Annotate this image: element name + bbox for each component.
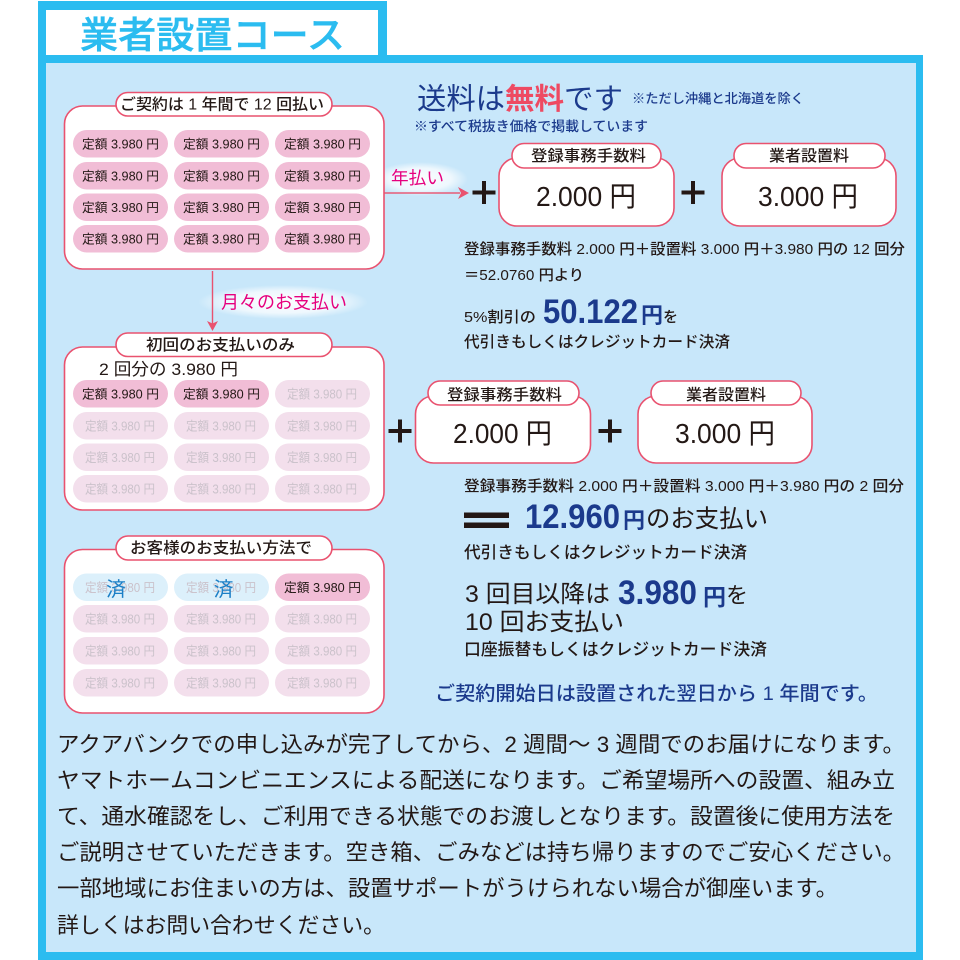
pill grid: paid and remaining payments: 定額 3.980 円 xyxy=(186,612,256,626)
pill grid: 12 monthly payments: 定額 3.980 円 xyxy=(284,232,361,246)
icon: equals xyxy=(464,512,509,528)
text: annual payment method: 代引きもしくはクレジットカード決済 xyxy=(464,333,730,351)
pill grid: 12 monthly payments xyxy=(73,130,370,252)
text: annual total: 5%割引の xyxy=(464,309,536,326)
text: third payment onward: 3 回目以降は xyxy=(465,581,610,608)
pill grid: first two payments highlighted: 定額 3.980 円 xyxy=(186,420,256,434)
plus xyxy=(682,181,704,204)
pill grid: first two payments highlighted: 定額 3.980 円 xyxy=(82,388,159,402)
text: third payment onward: 3.980 xyxy=(618,574,697,612)
text block: delivery explanation: アクアバンクでの申し込みが完了してから、2 週間～ 3 週間でのお届けになります。 xyxy=(57,732,905,757)
text: annual total xyxy=(464,293,678,331)
card: installation fee (annual): 3.000 円 xyxy=(758,181,858,212)
heading: free shipping xyxy=(417,83,623,116)
text: third payment onward xyxy=(465,574,748,636)
card: registration fee (annual): 2.000 円 xyxy=(536,181,636,212)
heading: free shipping: 無料 xyxy=(505,83,564,116)
pill grid: 12 monthly payments: 定額 3.980 円 xyxy=(183,170,260,184)
pill grid: paid and remaining payments: 済 xyxy=(106,578,126,601)
pill grid: paid and remaining payments: 定額 3.980 円 xyxy=(85,644,155,658)
plus xyxy=(388,420,412,442)
text: annual total: 50.122 xyxy=(543,293,638,331)
pill grid: 12 monthly payments: 定額 3.980 円 xyxy=(284,201,361,215)
text: later payment method: 口座振替もしくはクレジットカード決済 xyxy=(464,640,768,659)
pill grid: first two payments highlighted: 定額 3.980 円 xyxy=(287,451,357,465)
text: first payment total: 12.960 xyxy=(525,498,620,536)
pill grid: paid and remaining payments: 定額 3.980 円 xyxy=(287,612,357,626)
pill grid: first two payments highlighted: 定額 3.980 円 xyxy=(287,420,357,434)
pill grid: 12 monthly payments: 定額 3.980 円 xyxy=(82,138,159,152)
pill grid: paid and remaining payments xyxy=(73,574,370,696)
card: registration fee (annual): 登録事務手数料 xyxy=(531,147,647,165)
pill grid: first two payments highlighted: 定額 3.980 円 xyxy=(186,482,256,496)
text block: delivery explanation: 一部地域にお住まいの方は、設置サポートがうけられない場合が御座います。 xyxy=(57,876,838,901)
card: installation fee (annual) xyxy=(722,144,896,226)
pill grid: 12 monthly payments: 定額 3.980 円 xyxy=(82,201,159,215)
card: registration fee (monthly) xyxy=(416,381,590,463)
pill grid: 12 monthly payments: 定額 3.980 円 xyxy=(82,170,159,184)
pill grid: paid and remaining payments: 定額 3.980 円 xyxy=(287,676,357,690)
pill grid: first two payments highlighted: 定額 3.980 円 xyxy=(85,451,155,465)
text: monthly calculation: 登録事務手数料 2.000 円＋設置料 3.000 円＋3.980 円の 2 回分 xyxy=(464,478,904,495)
label: contract xyxy=(116,92,332,116)
text: annual total: 円 xyxy=(641,303,663,328)
heading: free shipping: です xyxy=(564,83,623,116)
card: installation fee (annual): 業者設置料 xyxy=(769,147,850,165)
text: contract start note: ご契約開始日は設置された翌日から 1 年間です。 xyxy=(435,683,878,705)
pill grid: paid and remaining payments: 定額 3.980 円 xyxy=(186,644,256,658)
pill grid: first two payments highlighted: 定額 3.980 円 xyxy=(85,420,155,434)
label: customer payment method xyxy=(116,536,332,560)
pill grid: paid and remaining payments: 定額 3.980 円 xyxy=(85,612,155,626)
text block: delivery explanation: ヤマトホームコンビニエンスによる配送になります。ご希望場所への設置、組み立 xyxy=(57,768,895,793)
panel: payment progress xyxy=(64,536,384,713)
arrow: monthly payment: 月々のお支払い xyxy=(221,292,347,312)
pill grid: 12 monthly payments: 定額 3.980 円 xyxy=(183,201,260,215)
label: first payment xyxy=(116,333,332,356)
label: customer payment method: お客様のお支払い方法で xyxy=(130,539,312,557)
text: first payment total: 円 xyxy=(623,508,645,533)
card: registration fee (monthly): 登録事務手数料 xyxy=(447,386,563,404)
pill grid: 12 monthly payments: 定額 3.980 円 xyxy=(284,170,361,184)
note: tax excluded: ※すべて税抜き価格で掲載しています xyxy=(414,119,648,134)
pill grid: first two payments highlighted: 定額 3.980 円 xyxy=(287,482,357,496)
panel: 12 payments xyxy=(64,92,384,269)
pill grid: first two payments highlighted: 定額 3.980 円 xyxy=(85,482,155,496)
plus xyxy=(598,420,622,442)
panel: first payment only xyxy=(64,333,384,510)
card: installation fee (monthly): 業者設置料 xyxy=(686,386,767,404)
pill grid: 12 monthly payments: 定額 3.980 円 xyxy=(82,232,159,246)
text: annual calculation: ＝52.0760 円より xyxy=(464,267,584,284)
text: first payment total: のお支払い xyxy=(646,505,768,533)
text: annual calculation: 登録事務手数料 2.000 円＋設置料 3.000 円＋3.980 円の 12 回分 xyxy=(464,241,905,258)
title: 業者設置コース xyxy=(80,15,345,56)
arrow: annual payment xyxy=(372,162,469,199)
text block: delivery explanation: て、通水確認をし、ご利用できる状態でのお渡しとなります。設置後に使用方法を xyxy=(57,804,895,829)
pill grid: first two payments highlighted: 定額 3.980 円 xyxy=(287,388,357,402)
arrow: annual payment: 年払い xyxy=(391,168,444,188)
pill grid: first two payments highlighted xyxy=(73,380,370,502)
pill grid: paid and remaining payments: 定額 3.980 円 xyxy=(284,581,361,595)
label: first payment: 初回のお支払いのみ xyxy=(146,336,295,354)
pill grid: paid and remaining payments: 定額 3.980 円 xyxy=(186,676,256,690)
text: two payments: 2 回分の 3.980 円 xyxy=(99,360,238,379)
pill grid: paid and remaining payments: 定額 3.980 円 xyxy=(287,644,357,658)
pill grid: first two payments highlighted: 定額 3.980 円 xyxy=(183,388,260,402)
text block: delivery explanation xyxy=(57,732,905,938)
card: registration fee (monthly): 2.000 円 xyxy=(453,418,552,449)
text: third payment onward: 円 xyxy=(703,584,726,610)
pill grid: first two payments highlighted: 定額 3.980 円 xyxy=(186,451,256,465)
pill grid: paid and remaining payments: 定額 3.980 円 xyxy=(186,581,256,595)
text: third payment onward: を xyxy=(726,583,748,608)
pill grid: 12 monthly payments: 定額 3.980 円 xyxy=(183,232,260,246)
text: annual calculation xyxy=(464,241,905,284)
plus xyxy=(472,181,496,204)
card: registration fee (annual) xyxy=(499,144,674,226)
heading: free shipping: 送料は xyxy=(417,83,505,116)
pill grid: paid and remaining payments: 定額 3.980 円 xyxy=(85,581,155,595)
text block: delivery explanation: ご説明させていただきます。空き箱、ごみなどは持ち帰りますのでご安心ください。 xyxy=(57,840,905,865)
pill grid: paid and remaining payments: 定額 3.980 円 xyxy=(85,676,155,690)
text block: delivery explanation: 詳しくはお問い合わせください。 xyxy=(57,913,385,938)
card: installation fee (monthly) xyxy=(638,381,812,463)
note: shipping exclusions: ※ただし沖縄と北海道を除く xyxy=(632,91,804,106)
pill grid: 12 monthly payments: 定額 3.980 円 xyxy=(284,138,361,152)
label: contract: ご契約は 1 年間で 12 回払い xyxy=(120,96,324,114)
text: first payment method: 代引きもしくはクレジットカード決済 xyxy=(464,543,748,562)
pill grid: 12 monthly payments: 定額 3.980 円 xyxy=(183,138,260,152)
text: third payment onward: 10 回お支払い xyxy=(465,609,624,636)
pill grid: paid and remaining payments: 済 xyxy=(214,578,234,601)
card: installation fee (monthly): 3.000 円 xyxy=(675,418,775,449)
arrow: monthly payment xyxy=(198,271,368,331)
text: annual total: を xyxy=(663,309,678,326)
text: first payment total xyxy=(525,498,768,536)
